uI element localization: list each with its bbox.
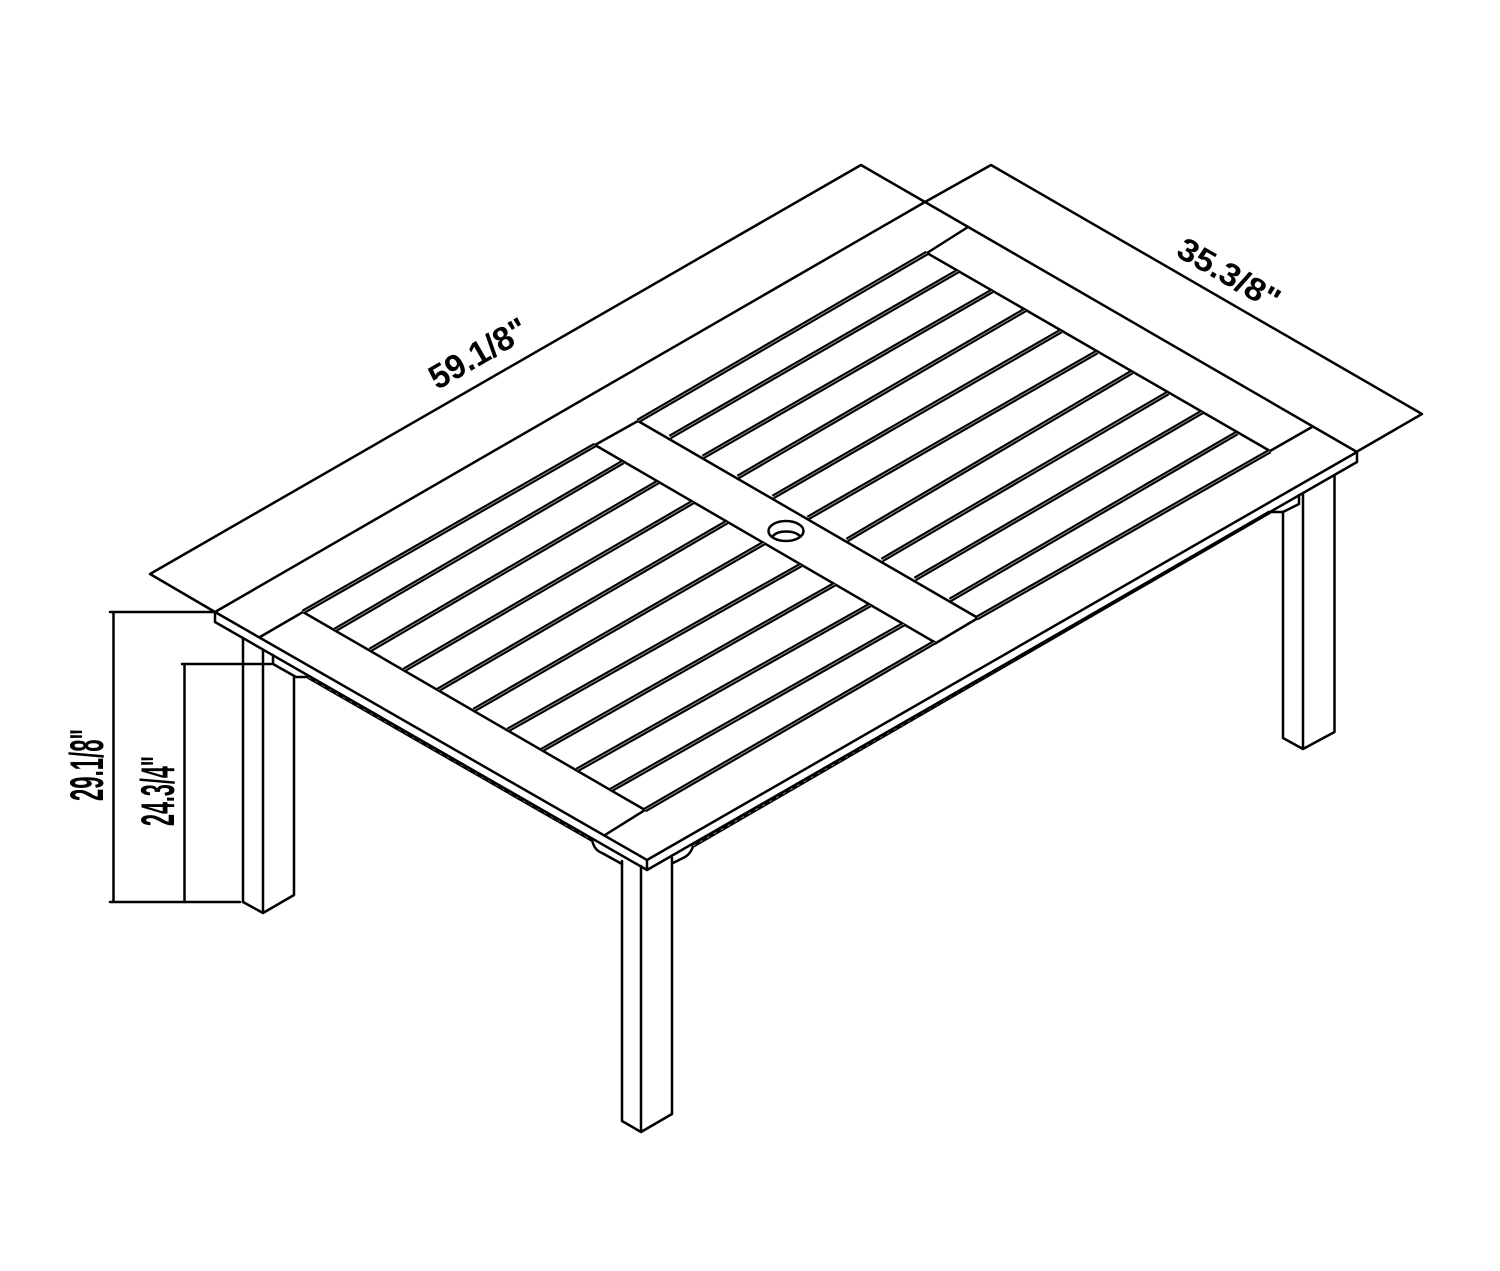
slats: back half: [638, 253, 1270, 618]
label: width: 35.3/8": [1171, 230, 1287, 318]
umbrella hole: [768, 521, 804, 541]
table top outline with edge thickness: [215, 202, 1357, 870]
leg: back left: [243, 638, 294, 913]
dimension lines: overall height: [110, 612, 240, 902]
end boards and centre band joints: [260, 227, 1312, 835]
apron: right side with brackets: [673, 495, 1299, 863]
slats: front half: [303, 445, 935, 810]
label: length: 59.1/8": [422, 310, 535, 397]
dimension lines: width 35.3/8: [925, 165, 1422, 451]
leg: front: [622, 858, 672, 1132]
dimension lines: clearance height: [182, 664, 271, 902]
technical drawing: outdoor dining table: 24.3/4": [131, 756, 184, 826]
dimension lines: length 59.1/8: [150, 165, 925, 612]
technical drawing: outdoor dining table: 29.1/8": [60, 729, 113, 801]
leg: back right: [1283, 475, 1334, 749]
apron: left side with brackets: [273, 655, 622, 864]
